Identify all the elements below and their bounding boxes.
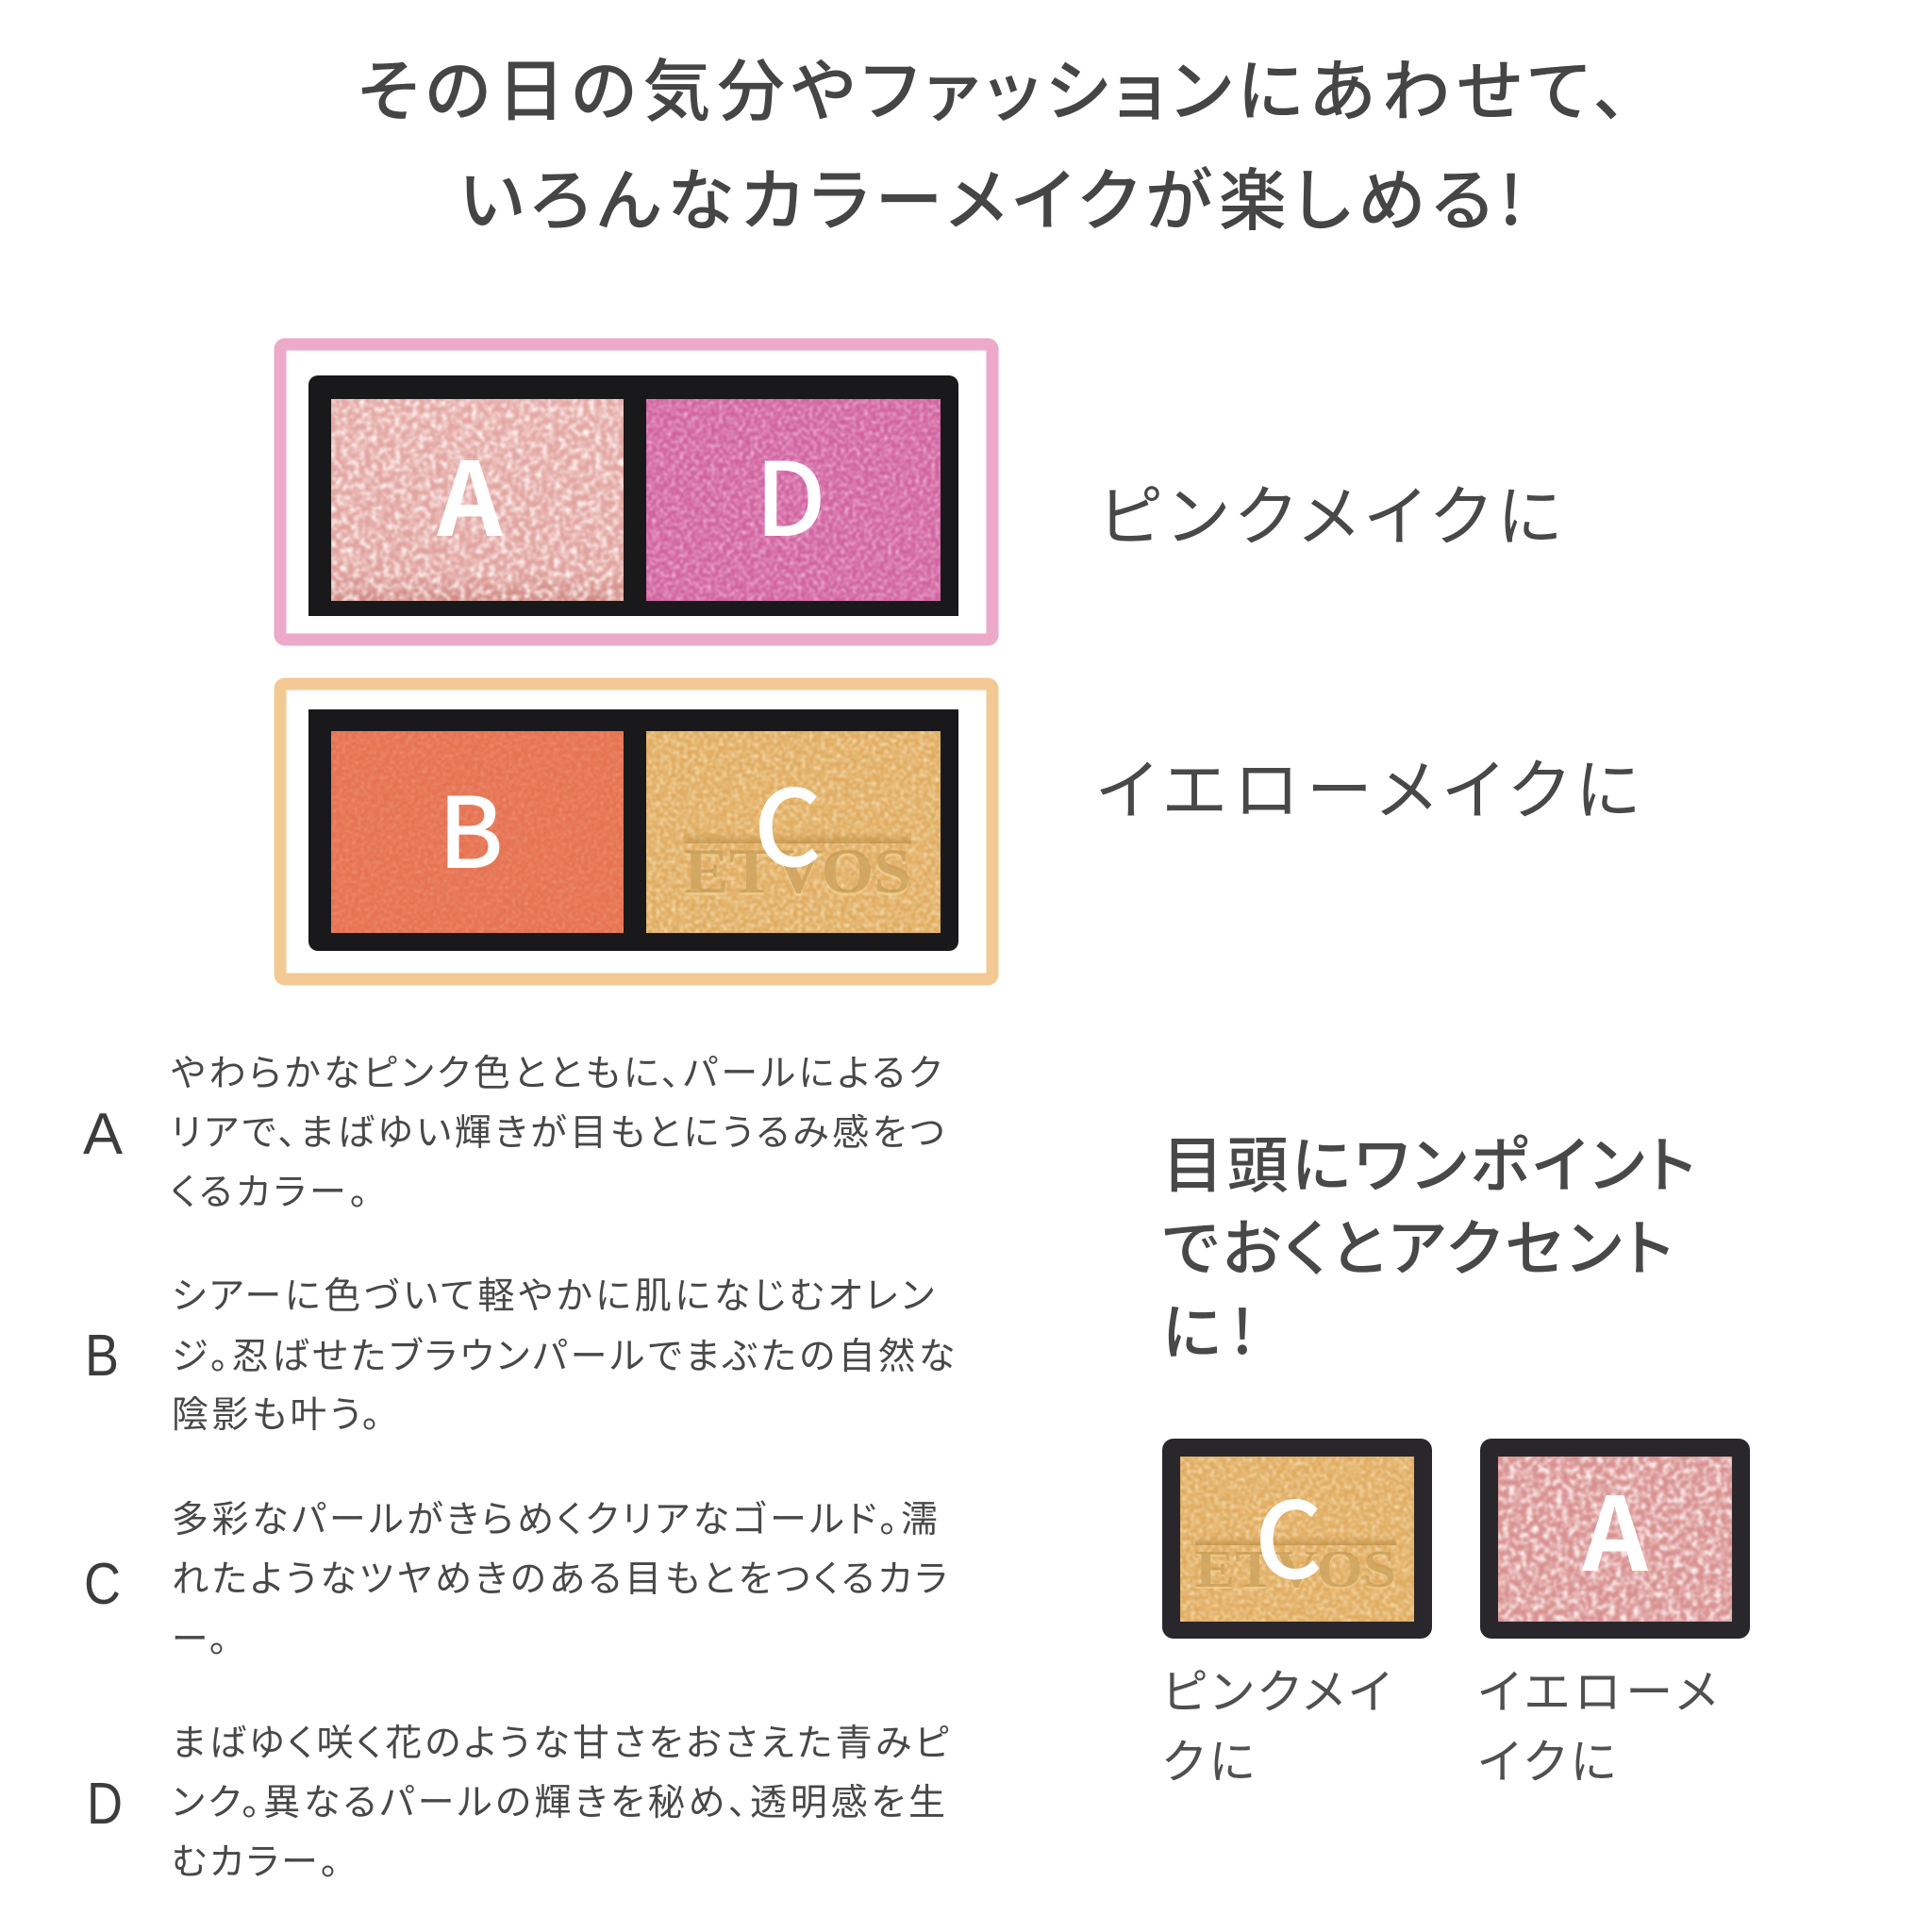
panel: yellow palette frame bbox=[280, 684, 992, 979]
caption: yellow makeup: イエローメ bbox=[1478, 1655, 1717, 1723]
pan: D blue pink: D bbox=[755, 419, 826, 566]
caption: pink makeup: クに bbox=[1162, 1724, 1255, 1792]
description: A: A bbox=[83, 1102, 124, 1167]
swatch: A pink: A bbox=[1581, 1454, 1648, 1601]
description: A: リアで、まばゆい輝きが目もとにうるみ感をつ bbox=[171, 1104, 944, 1157]
pan: A soft pink: A bbox=[436, 419, 503, 566]
heading: inner-corner accent: に! bbox=[1162, 1283, 1253, 1372]
title bbox=[358, 36, 1627, 244]
palette: pink A and D bbox=[308, 375, 958, 616]
description: B: 陰影も叶う。 bbox=[172, 1386, 380, 1439]
description: C: れたようなツヤめきのある目もとをつくるカラ bbox=[172, 1550, 947, 1603]
pan: C gold: ETVOS bbox=[684, 838, 911, 909]
description: D: ンク。異なるパールの輝きを秘め、透明感を生 bbox=[172, 1774, 945, 1826]
description: C bbox=[84, 1491, 947, 1663]
pan: D blue pink bbox=[646, 399, 941, 601]
heading: inner-corner accent bbox=[1162, 1116, 1695, 1372]
palette: yellow B and C bbox=[308, 709, 958, 951]
description: B: B bbox=[85, 1324, 119, 1389]
description: D bbox=[87, 1714, 949, 1886]
pan: B orange: B bbox=[438, 754, 504, 896]
pan: A soft pink bbox=[331, 399, 624, 601]
description: D: まばゆく咲く花のような甘さをおさえた青みピ bbox=[172, 1714, 949, 1767]
description: B: ジ。忍ばせたブラウンパールでまぶたの自然な bbox=[172, 1327, 955, 1380]
title: その日の気分やファッションにあわせて、 bbox=[358, 36, 1627, 135]
description: B: シアーに色づいて軽やかに肌になじむオレン bbox=[172, 1267, 934, 1320]
pan: C gold: ETVOS bbox=[684, 835, 911, 907]
description: D: D bbox=[87, 1772, 123, 1837]
caption: pink makeup: ピンクメイ bbox=[1162, 1655, 1391, 1723]
title: いろんなカラーメイクが楽しめる! bbox=[459, 145, 1523, 244]
description: A bbox=[83, 1044, 944, 1216]
description: C: ー。 bbox=[172, 1610, 227, 1663]
swatch: A pink bbox=[1480, 1439, 1750, 1639]
pan: C gold bbox=[646, 731, 941, 933]
pan: B orange bbox=[331, 731, 624, 933]
description: A: やわらかなピンク色とともに、パールによるク bbox=[171, 1044, 941, 1097]
caption: yellow makeup bbox=[1478, 1655, 1717, 1792]
swatch: C gold: ETVOS bbox=[1195, 1541, 1396, 1599]
pan: C gold: C bbox=[754, 744, 822, 897]
label: yellow makeup: イエローメイクに bbox=[1097, 738, 1640, 833]
description: B bbox=[85, 1267, 955, 1439]
caption: yellow makeup: イクに bbox=[1478, 1724, 1616, 1792]
heading: inner-corner accent: 目頭にワンポイント bbox=[1162, 1116, 1695, 1205]
heading: inner-corner accent: でおくとアクセント bbox=[1162, 1199, 1673, 1288]
swatch: C gold bbox=[1162, 1439, 1432, 1639]
label: pink makeup: ピンクメイクに bbox=[1099, 464, 1561, 559]
swatch: C gold: C bbox=[1255, 1457, 1323, 1609]
description: C: C bbox=[84, 1552, 121, 1617]
description: A: くるカラー。 bbox=[171, 1163, 368, 1216]
description: D: むカラー。 bbox=[172, 1833, 339, 1886]
caption: pink makeup bbox=[1162, 1655, 1391, 1792]
swatch: C gold: ETVOS bbox=[1195, 1542, 1396, 1601]
description: C: 多彩なパールがきらめくクリアなゴールド。濡 bbox=[172, 1491, 938, 1543]
panel: pink palette frame bbox=[280, 344, 992, 640]
